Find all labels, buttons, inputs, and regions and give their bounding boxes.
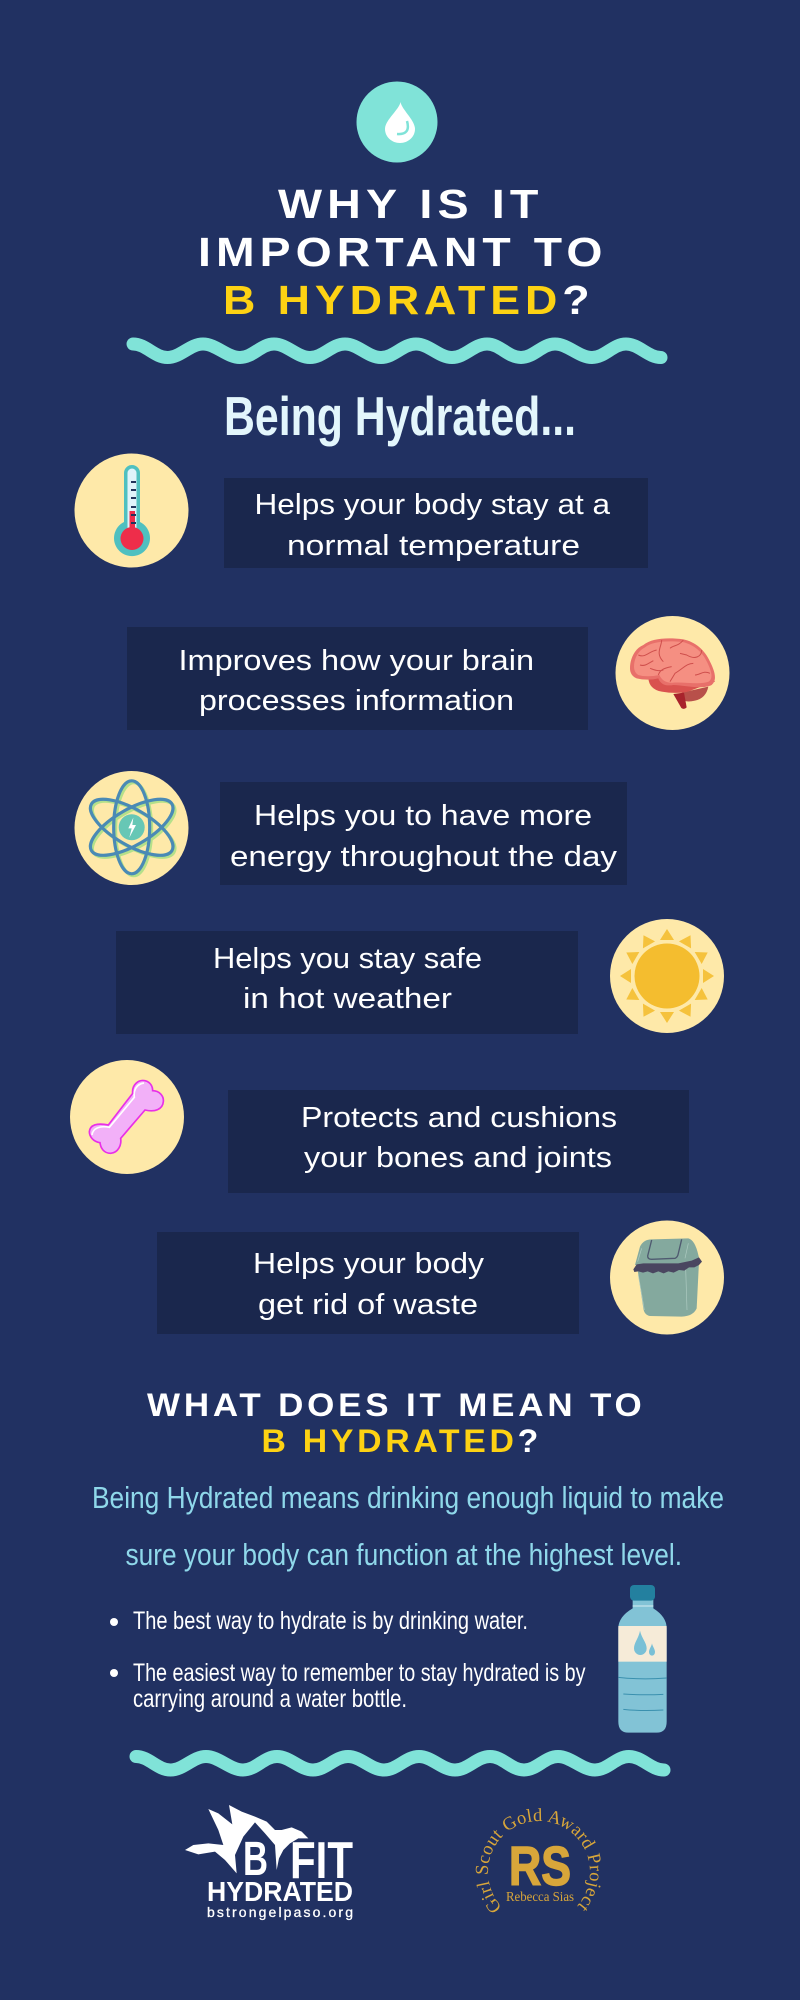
logo: Girl Scout Gold Award Project: Girl Scout Gold Award Project bbox=[476, 1808, 600, 1912]
panel: waste: get rid of waste bbox=[258, 1289, 478, 1321]
panel: brain: Improves how your brain bbox=[178, 645, 534, 677]
icon: water bottle bbox=[618, 1585, 667, 1733]
logo: B Fit Hydrated bbox=[185, 1805, 353, 1920]
heading: Being Hydrated: Being Hydrated... bbox=[224, 385, 576, 447]
icon: thermometer bbox=[74, 454, 188, 568]
text block: definition bbox=[92, 1480, 724, 1572]
bullet list: carrying around a water bottle. bbox=[133, 1685, 407, 1713]
panel: waste: Helps your body bbox=[253, 1248, 485, 1280]
logo: B Fit Hydrated: HYDRATED bbox=[207, 1876, 353, 1907]
bullet list: The best way to hydrate is by drinking water. bbox=[133, 1607, 528, 1635]
title: B HYDRATED ? bbox=[223, 277, 595, 323]
title bbox=[198, 181, 608, 323]
heading: what does it mean bbox=[147, 1387, 646, 1459]
panel: waste bbox=[157, 1232, 579, 1334]
panel: temperature: normal temperature bbox=[287, 530, 580, 562]
icon: atom bbox=[74, 771, 188, 885]
wave divider: bottom bbox=[136, 1756, 664, 1770]
icon: trash can bbox=[610, 1220, 724, 1334]
logo: Girl Scout Gold Award Project: Rebecca Sias bbox=[506, 1890, 574, 1905]
panel: bones and joints: Protects and cushions bbox=[301, 1102, 617, 1134]
title: IMPORTANT TO bbox=[198, 229, 608, 275]
text block: definition: sure your body can function at the highest level. bbox=[126, 1537, 682, 1572]
panel: hot weather bbox=[116, 931, 578, 1034]
logo: Girl Scout Gold Award Project: RS bbox=[509, 1835, 571, 1897]
panel: bones and joints: your bones and joints bbox=[304, 1142, 612, 1174]
icon: sun bbox=[610, 919, 724, 1033]
panel: energy bbox=[220, 782, 627, 885]
heading: what does it mean: WHAT DOES IT MEAN TO bbox=[147, 1387, 646, 1423]
bullet list: The easiest way to remember to stay hydrated is by bbox=[133, 1659, 586, 1687]
icon: water drop bbox=[356, 82, 438, 162]
wave divider: top bbox=[133, 344, 661, 358]
logo: B Fit Hydrated: bstrongelpaso.org bbox=[207, 1904, 353, 1920]
panel: energy: Helps you to have more bbox=[254, 800, 592, 832]
panel: brain: processes information bbox=[199, 685, 514, 717]
logo: B Fit Hydrated: B bbox=[243, 1833, 268, 1886]
panel: bones and joints bbox=[228, 1090, 689, 1193]
heading: what does it mean: B HYDRATED ? bbox=[262, 1423, 542, 1459]
icon: brain bbox=[616, 616, 730, 730]
bullet list bbox=[110, 1607, 586, 1713]
logo: B Fit Hydrated: FIT bbox=[290, 1832, 353, 1890]
panel: hot weather: in hot weather bbox=[243, 983, 452, 1015]
panel: hot weather: Helps you stay safe bbox=[213, 943, 482, 975]
panel: temperature bbox=[224, 478, 648, 568]
icon: bone bbox=[70, 1060, 184, 1174]
panel: temperature: Helps your body stay at a bbox=[254, 489, 611, 521]
title: WHY IS IT bbox=[278, 181, 544, 227]
panel: brain bbox=[127, 627, 588, 730]
panel: energy: energy throughout the day bbox=[230, 841, 618, 873]
